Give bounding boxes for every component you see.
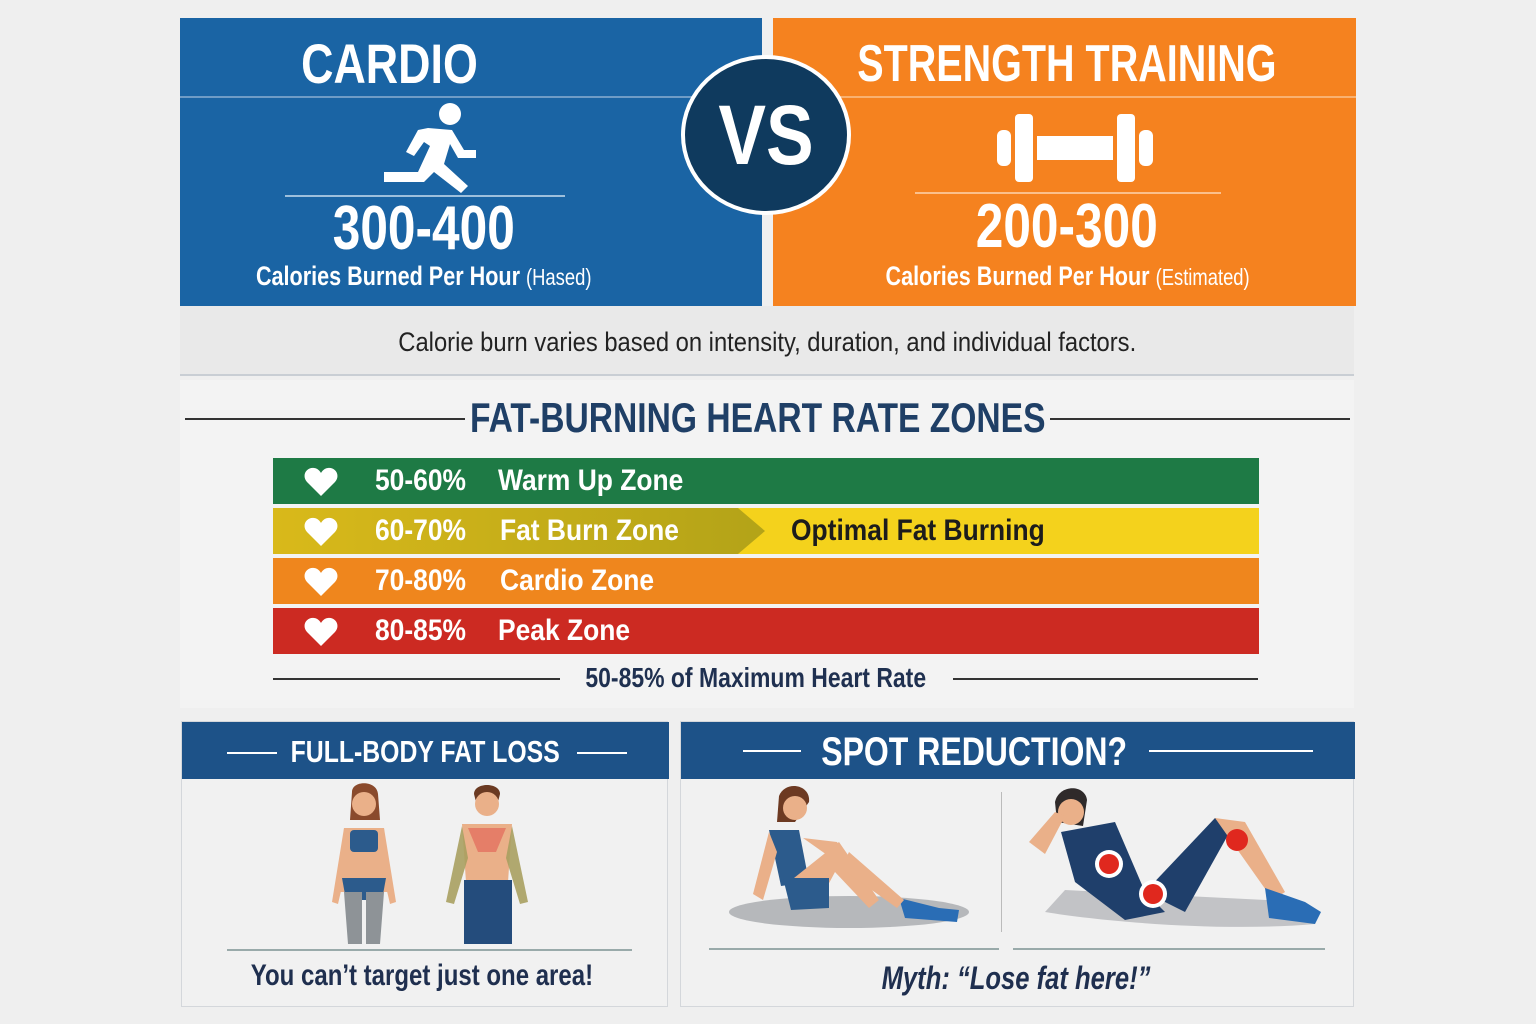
panel: cardio (180, 18, 762, 306)
zone: cardio: Cardio Zone (500, 564, 654, 597)
icon: VS badge: VS (718, 88, 814, 182)
cardio title: CARDIO (301, 32, 477, 95)
panel: heart rate zones (180, 380, 1354, 708)
zone: warm up (273, 458, 1259, 504)
cardio subtitle: Calories Burned Per Hour (Hased) (256, 261, 592, 291)
panel: strength (773, 18, 1356, 306)
zone: fat burn: Optimal Fat Burning (791, 514, 1045, 547)
max heart rate caption: 50-85% of Maximum Heart Rate (586, 662, 926, 693)
illustration: sit-up man with red spots (1029, 788, 1321, 927)
panel: spot reduction (680, 721, 1354, 1007)
strength calories: 200-300 (976, 192, 1158, 261)
illustration: woman and man (332, 783, 528, 944)
zone: fat burn (273, 508, 1259, 554)
header (182, 722, 669, 779)
zone: warm up: Warm Up Zone (498, 464, 683, 497)
zone: fat burn: 60-70% (375, 514, 466, 547)
icon: dumbbell (997, 114, 1153, 182)
zones heading: FAT-BURNING HEART RATE ZONES (470, 394, 1046, 441)
zone: cardio: 70-80% (375, 564, 466, 597)
icon: VS badge (681, 55, 851, 215)
header: FULL-BODY FAT LOSS (291, 734, 560, 769)
caption: Myth: “Lose fat here!” (882, 960, 1150, 996)
zone: cardio (273, 558, 1259, 604)
zone: peak: Peak Zone (498, 614, 630, 647)
strength title: STRENGTH TRAINING (857, 35, 1277, 93)
note text: Calorie burn varies based on intensity, duration, and individual factors. (398, 327, 1136, 357)
panel: full-body fat loss (181, 721, 668, 1007)
icon: runner (384, 103, 476, 193)
caption: You can’t target just one area! (251, 959, 593, 992)
panel: spot reduction: SPOT REDUCTION? (821, 730, 1127, 774)
header (681, 722, 1355, 779)
strength subtitle: Calories Burned Per Hour (Estimated) (886, 261, 1250, 291)
cardio calories: 300-400 (333, 194, 515, 263)
illustration: sit-up woman (729, 786, 969, 928)
zone: peak: 80-85% (375, 614, 466, 647)
zone: peak (273, 608, 1259, 654)
zone: fat burn: Fat Burn Zone (500, 514, 679, 547)
note text (180, 306, 1354, 376)
zone: warm up: 50-60% (375, 464, 466, 497)
